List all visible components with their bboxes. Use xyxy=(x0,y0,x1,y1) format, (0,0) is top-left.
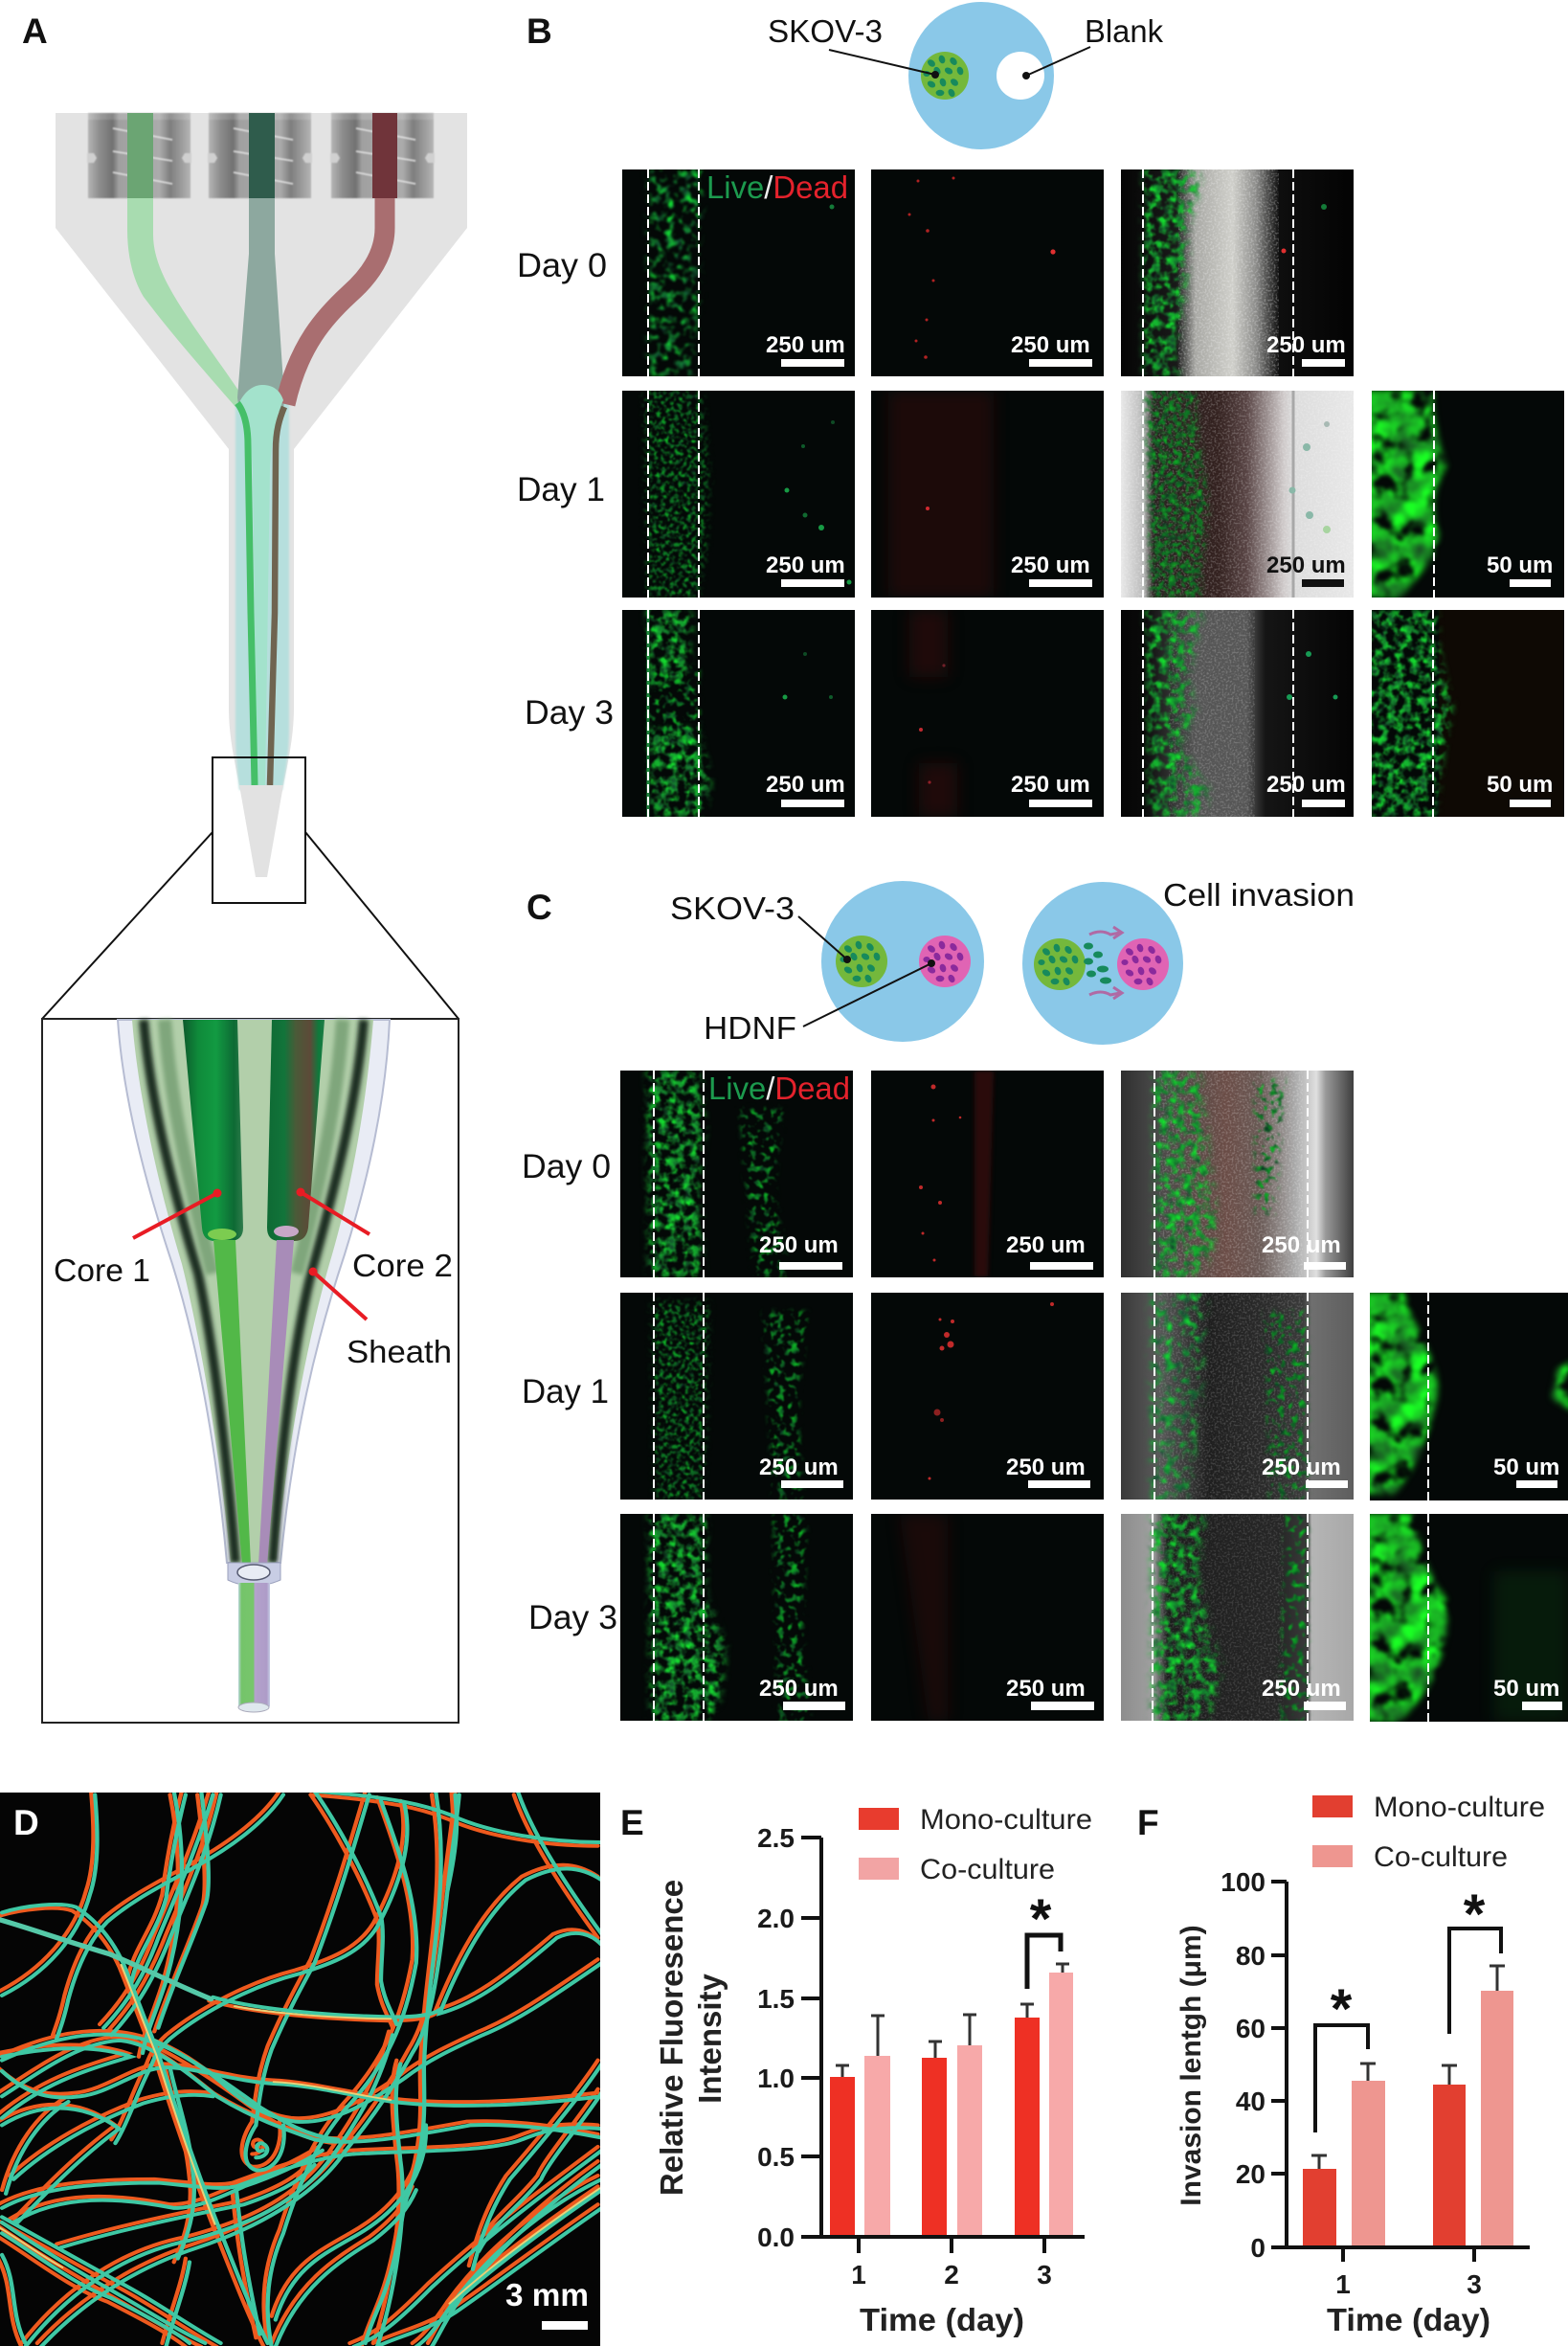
scale bar: 250 um xyxy=(766,553,845,578)
leader SKOV-3 xyxy=(798,916,851,963)
label core 2: Core 2 xyxy=(352,1248,453,1283)
SKOV-3 core xyxy=(836,936,887,987)
scale bar xyxy=(766,776,844,807)
scale bar xyxy=(759,1676,845,1710)
invasion arrow top xyxy=(1089,927,1122,938)
B day 1 merged xyxy=(1121,391,1354,598)
axes xyxy=(1271,1882,1530,2262)
schematic B: fibre cross section xyxy=(768,2,1163,149)
label SKOV-3: SKOV-3 xyxy=(768,13,883,49)
scale bar xyxy=(766,336,844,367)
core 1 stream xyxy=(237,403,255,785)
scale bar: 250 um xyxy=(1266,772,1346,798)
centre channel xyxy=(237,113,284,412)
inset frame xyxy=(42,1019,459,1723)
panel label D: D xyxy=(13,1803,39,1842)
significance bracket day 1: * xyxy=(1331,1978,1353,2041)
C day 1 dead xyxy=(871,1293,1104,1500)
scale bar xyxy=(542,2321,588,2330)
y tick labels xyxy=(1221,1867,1266,2263)
core 2 stream xyxy=(270,407,284,785)
nozzle glass wall xyxy=(118,1020,390,1563)
scale bar: 250 um xyxy=(759,1676,839,1702)
label cell invasion: Cell invasion xyxy=(1163,877,1355,913)
legend co-culture xyxy=(1312,1841,1508,1873)
SKOV-3 cells xyxy=(923,55,965,98)
pointer core 2 xyxy=(297,1188,370,1234)
panel F: invasion length bar chart xyxy=(1176,1792,1545,2337)
SKOV-3 cells xyxy=(840,940,882,983)
panel label E: E xyxy=(620,1803,644,1842)
panel A inset: nozzle cross section xyxy=(42,1019,459,1723)
shaded sheath band right xyxy=(297,1020,343,1274)
right channel through screw xyxy=(372,113,397,198)
leader SKOV-3 xyxy=(829,50,939,79)
target HDNF core xyxy=(1117,938,1169,990)
scale bar xyxy=(760,1236,842,1270)
invasion disc xyxy=(1022,882,1183,1045)
scale bar xyxy=(1267,776,1345,807)
co-culture bars xyxy=(864,1973,1073,2237)
row label C day 0: Day 0 xyxy=(522,1148,611,1185)
B day 0 dead xyxy=(871,169,1104,376)
mono bars xyxy=(1303,2085,1466,2247)
x tick labels: 1 xyxy=(851,2260,866,2290)
scale bar: 50 um xyxy=(1493,1455,1559,1480)
scale bar xyxy=(766,556,844,587)
scale bar: 250 um xyxy=(1011,553,1090,578)
HDNF cells xyxy=(923,940,965,983)
scale label: 3 mm xyxy=(505,2277,589,2312)
sheath fluid xyxy=(132,1020,373,1563)
error bars xyxy=(836,1964,1069,2077)
pointer core 1 xyxy=(133,1189,221,1238)
B day 1 zoom xyxy=(1362,391,1564,598)
scale bar: 250 um xyxy=(1011,332,1090,358)
significance bracket: * xyxy=(1030,1888,1052,1951)
co-culture disc xyxy=(821,881,984,1042)
panel label C: C xyxy=(526,888,552,927)
core 2 stream xyxy=(258,1240,294,1565)
scale bar xyxy=(1011,336,1092,367)
bars xyxy=(830,2018,1040,2237)
x axis title: Time (day) xyxy=(1327,2302,1490,2337)
label SKOV-3: SKOV-3 xyxy=(670,891,795,926)
label core 1: Core 1 xyxy=(54,1252,150,1288)
left green channel xyxy=(127,113,241,407)
y axis title line 2: Intensity xyxy=(692,1974,728,2104)
B day 3 zoom xyxy=(1362,610,1568,818)
B day 0 live xyxy=(622,169,855,376)
y tick labels: 80 xyxy=(1236,1941,1266,1971)
y tick labels: 2.5 xyxy=(757,1823,795,1853)
core 1 outlet xyxy=(208,1229,236,1240)
scale bar xyxy=(1267,336,1345,367)
y axis title: Relative Fluoresence xyxy=(654,1880,689,2196)
y tick labels: 60 xyxy=(1236,2014,1266,2043)
central dome xyxy=(239,385,283,785)
significance bracket day 1 xyxy=(1315,1978,1368,2132)
core 2 capillary xyxy=(267,1020,325,1241)
invading SKOV-3 core xyxy=(1034,938,1086,990)
core 1 capillary xyxy=(183,1020,243,1241)
intertwined fibres xyxy=(0,1792,602,2346)
right red channel xyxy=(285,113,385,404)
significance bracket day 3: * xyxy=(1464,1884,1486,1946)
y tick labels: 1.0 xyxy=(757,2064,795,2093)
C day 3 dead xyxy=(871,1514,1104,1722)
x tick labels xyxy=(851,2260,1052,2290)
scale bar: 250 um xyxy=(1266,553,1346,578)
dark wall streak right xyxy=(273,1020,364,1563)
C day 1 zoom xyxy=(1360,1293,1568,1500)
y tick labels: 0.0 xyxy=(757,2222,795,2252)
leader HDNF xyxy=(803,959,935,1026)
x tick labels: 2 xyxy=(944,2260,959,2290)
x tick labels: 1 xyxy=(1335,2269,1351,2299)
scale bar xyxy=(1011,556,1092,587)
C day 3 zoom xyxy=(1360,1514,1568,1722)
scale bar: 250 um xyxy=(759,1455,839,1480)
scale bar: 250 um xyxy=(1011,772,1090,798)
scale bar: 250 um xyxy=(1266,332,1346,358)
centre channel through screw xyxy=(249,113,275,198)
nozzle cone tip xyxy=(239,785,283,877)
core 1 stream xyxy=(213,1240,251,1565)
panel D: fibre photograph xyxy=(0,1792,602,2346)
co-culture bars xyxy=(1352,1991,1513,2247)
y axis title: Invasion lentgh (μm) xyxy=(1176,1925,1207,2206)
panel label A: A xyxy=(22,11,48,51)
y tick labels xyxy=(757,1823,795,2252)
B day 3 merged xyxy=(1121,610,1354,817)
row label C day 3: Day 3 xyxy=(528,1599,617,1636)
panel label F: F xyxy=(1137,1803,1159,1842)
y tick labels: 20 xyxy=(1236,2159,1266,2189)
tip end face xyxy=(238,1703,269,1712)
y tick labels: 100 xyxy=(1221,1867,1266,1897)
zoom box on nozzle tip xyxy=(213,757,305,903)
target HDNF cells xyxy=(1121,943,1163,986)
panel A: printhead overview xyxy=(56,113,467,877)
x tick labels xyxy=(1335,2269,1482,2299)
blank core xyxy=(997,52,1044,100)
label HDNF: HDNF xyxy=(704,1010,796,1046)
SKOV-3 core xyxy=(921,52,969,100)
collar opening xyxy=(237,1565,270,1580)
row label B day 1: Day 1 xyxy=(517,471,605,508)
scale bar xyxy=(1488,776,1552,807)
scale bar: 250 um xyxy=(759,1232,839,1258)
significance bracket xyxy=(1027,1888,1061,1989)
scale bar: 250 um xyxy=(1262,1232,1341,1258)
invading SKOV-3 cells xyxy=(1038,943,1080,986)
scale bar: 250 um xyxy=(1006,1232,1086,1258)
collar xyxy=(228,1563,280,1586)
scale bar: 50 um xyxy=(1487,553,1553,578)
stem sheath xyxy=(235,397,289,790)
dark wall streak left xyxy=(144,1020,235,1563)
x tick labels: 3 xyxy=(1467,2269,1482,2299)
significance bracket day 3 xyxy=(1449,1884,1501,2034)
B day 3 live xyxy=(622,610,855,817)
y tick labels: 1.5 xyxy=(757,1984,795,2014)
funnel body xyxy=(56,113,467,785)
centre screw xyxy=(208,113,312,198)
legend mono-culture: Mono-culture xyxy=(1374,1792,1545,1823)
legend co-culture: Co-culture xyxy=(1374,1841,1508,1873)
invasion arrow bottom xyxy=(1089,987,1122,999)
scale bar: 250 um xyxy=(1006,1676,1086,1702)
scale bar: 250 um xyxy=(1262,1676,1341,1702)
legend co-culture xyxy=(859,1854,1055,1885)
legend mono-culture: Mono-culture xyxy=(920,1804,1092,1836)
leader blank xyxy=(1022,47,1090,79)
scale bar: 50 um xyxy=(1493,1676,1559,1702)
axes xyxy=(801,1838,1085,2253)
outlet tip xyxy=(238,1583,270,1711)
C day 3 live xyxy=(620,1514,853,1722)
HDNF core xyxy=(919,936,971,987)
error bars xyxy=(1311,1966,1505,2169)
scale bar: 250 um xyxy=(766,332,845,358)
thick teal fibre xyxy=(0,1920,211,1999)
zoom connector lines xyxy=(42,832,459,1019)
C day 0 live xyxy=(620,1071,853,1277)
scale bar xyxy=(1006,1676,1094,1710)
right screw xyxy=(330,113,435,198)
panel label B: B xyxy=(526,11,552,51)
scale bar: 250 um xyxy=(766,772,845,798)
scale bar: 50 um xyxy=(1487,772,1553,798)
B day 1 dead xyxy=(871,391,1104,598)
hydrogel disc xyxy=(908,2,1054,149)
C day 1 merged xyxy=(1121,1293,1354,1500)
C day 3 merged xyxy=(1121,1514,1354,1722)
left screw xyxy=(87,113,191,198)
row label B day 3: Day 3 xyxy=(525,694,614,732)
y tick labels: 2.0 xyxy=(757,1904,795,1933)
yellow merged strands xyxy=(0,1965,600,2304)
label sheath: Sheath xyxy=(347,1334,452,1369)
migrating cells xyxy=(1084,942,1111,984)
legend co-culture: Co-culture xyxy=(920,1854,1055,1885)
pointer sheath xyxy=(309,1268,367,1320)
C day 0 dead xyxy=(871,1071,1104,1277)
B day 1 live xyxy=(622,391,855,598)
scale bar: 250 um xyxy=(1262,1455,1341,1480)
row label C day 1: Day 1 xyxy=(522,1373,609,1410)
B day 3 dead xyxy=(871,610,1104,817)
x axis title: Time (day) xyxy=(860,2302,1024,2337)
y tick labels: 0.5 xyxy=(757,2142,795,2172)
x tick labels: 3 xyxy=(1037,2260,1052,2290)
C day 0 merged xyxy=(1121,1071,1354,1277)
panel E: fluorescence bar chart xyxy=(654,1804,1092,2337)
C day 1 live xyxy=(620,1293,853,1500)
row label B day 0: Day 0 xyxy=(517,247,607,284)
legend live dead: Live/Dead xyxy=(708,1071,850,1106)
shaded sheath band left xyxy=(165,1020,213,1274)
scale bar: 250 um xyxy=(1006,1455,1086,1480)
label blank: Blank xyxy=(1085,13,1163,49)
schematic C: co-culture and invasion xyxy=(670,877,1355,1046)
y tick labels: 0 xyxy=(1250,2233,1266,2263)
y tick labels: 40 xyxy=(1236,2087,1266,2116)
scale bar xyxy=(1488,556,1552,587)
left channel through screw xyxy=(127,113,153,198)
scale bar xyxy=(1007,1236,1093,1270)
core 2 outlet xyxy=(274,1226,299,1237)
B day 0 merged xyxy=(1121,169,1354,376)
scale bar xyxy=(1267,556,1344,587)
legend live dead: Live/Dead xyxy=(706,169,848,205)
scale bar xyxy=(1011,776,1092,807)
scale bar xyxy=(1262,1236,1346,1270)
